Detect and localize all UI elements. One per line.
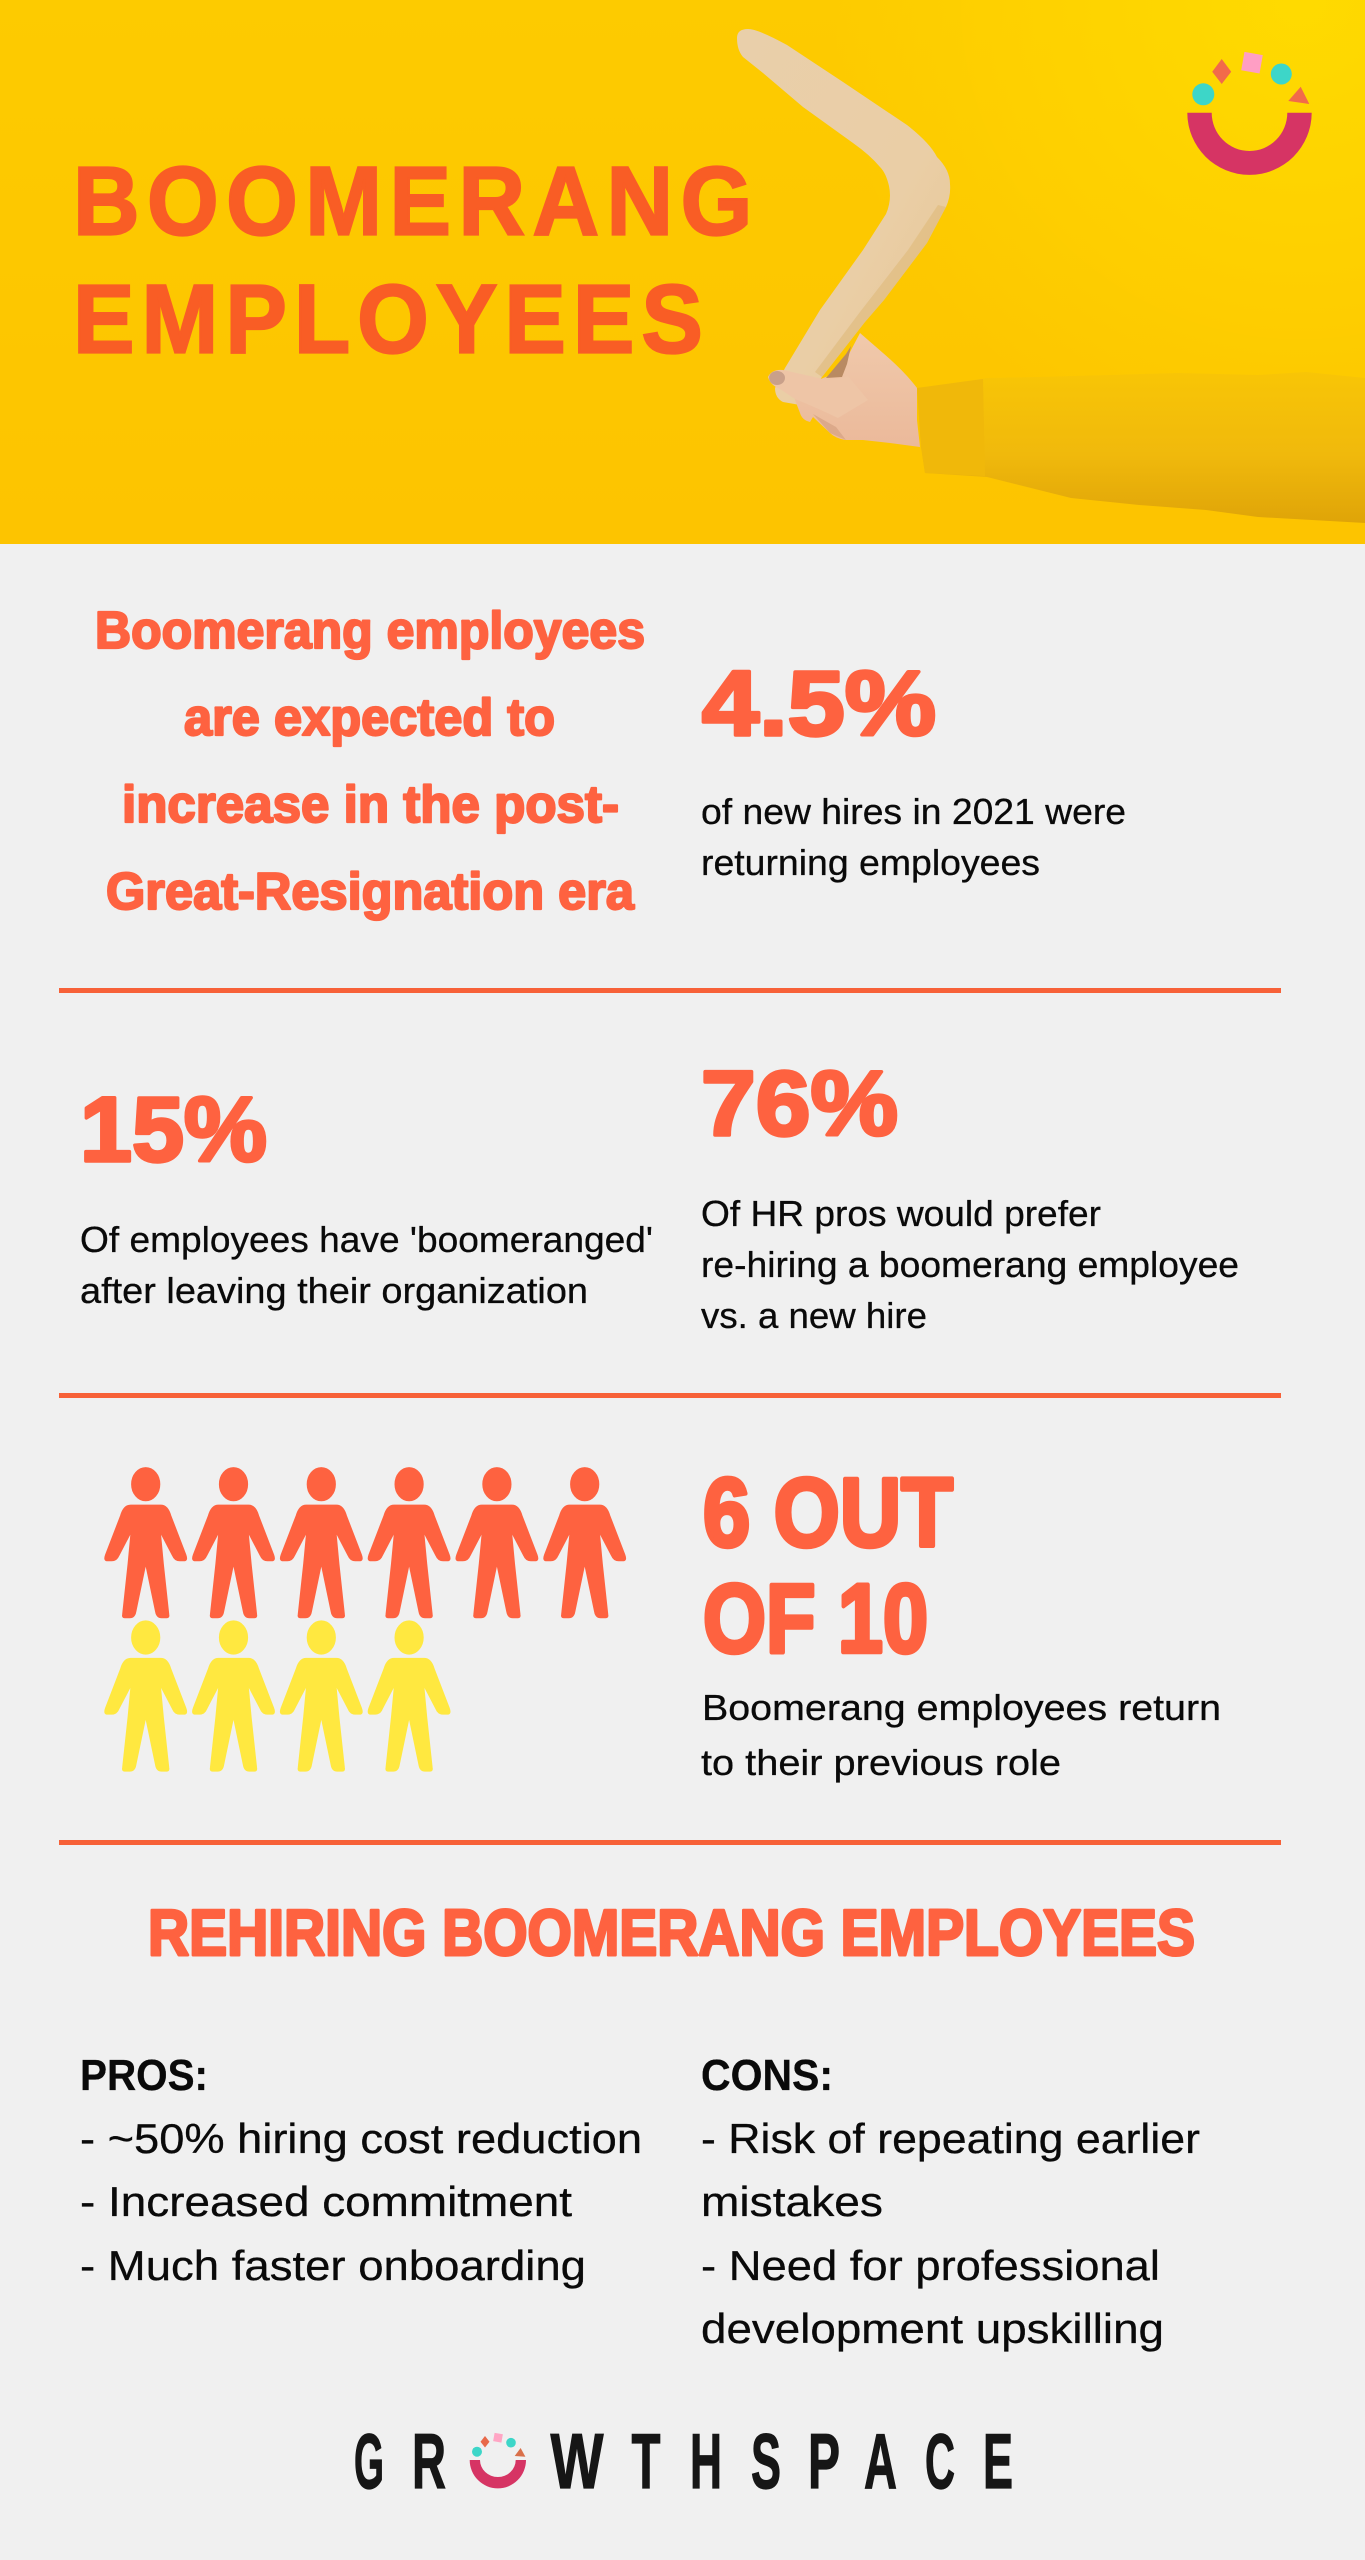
- stat text line 1: of new hires in 2021 were: [701, 791, 1126, 832]
- logo triangle: [1288, 87, 1309, 104]
- logo teal circle: [472, 2447, 482, 2457]
- stat text line 1: Of employees have 'boomeranged': [80, 1219, 653, 1260]
- letter S: S: [751, 2417, 781, 2505]
- stat text line 2: to their previous role: [701, 1742, 1061, 1783]
- footer: growthspace logo: G: [354, 2417, 384, 2505]
- logo diamond: [1212, 59, 1231, 84]
- header yellow background: [0, 0, 1365, 544]
- logo diamond: [480, 2436, 490, 2448]
- stat text line 1: Boomerang employees return: [702, 1687, 1221, 1728]
- stat: 15%: 15%: [80, 1079, 267, 1181]
- logo smile: [470, 2460, 526, 2488]
- stat text: new hires: [701, 791, 1126, 883]
- stat text line 2: returning employees: [701, 842, 1040, 883]
- con 2 line 1: - Need for professional: [701, 2242, 1160, 2289]
- heading: rehiring boomerang employees: REHIRING BOOMERANG EMPLOYEES: [148, 1896, 1195, 1969]
- photo: arm holding boomerang: [737, 29, 1365, 523]
- panel: 6 out of 10: [105, 1458, 1221, 1783]
- stat: 4.5%: 4.5%: [702, 653, 936, 755]
- divider 3: [59, 1840, 1281, 1845]
- stat text line 1: Of HR pros would prefer: [701, 1193, 1101, 1234]
- orange person 5: [456, 1468, 538, 1618]
- thumb: [768, 370, 868, 418]
- heading line 1: Boomerang employees: [95, 602, 645, 660]
- stat line 2: OF 10: [703, 1564, 928, 1673]
- heading: boomerang employees expected to increase: [95, 602, 645, 921]
- yellow person 4: [368, 1621, 450, 1771]
- logo triangle: [515, 2448, 525, 2457]
- yellow person 1: [105, 1621, 186, 1771]
- orange person 2: [193, 1468, 274, 1618]
- icon: growthspace logo: [1187, 52, 1312, 175]
- pro 1: - ~50% hiring cost reduction: [80, 2115, 642, 2162]
- con 2 line 2: development upskilling: [701, 2305, 1164, 2352]
- stat: 76%: 76%: [701, 1053, 898, 1155]
- title: [73, 147, 752, 374]
- panel: intro and 4.5%: [95, 602, 1126, 921]
- stat text: HR pros: [701, 1193, 1239, 1336]
- stat text line 2: after leaving their organization: [80, 1270, 588, 1311]
- letter H: H: [690, 2417, 722, 2505]
- logo teal circle: [1192, 83, 1214, 105]
- letter T: T: [632, 2417, 660, 2505]
- logo teal octagon: [1271, 64, 1292, 84]
- letter C: C: [925, 2417, 955, 2505]
- stat text line 3: vs. a new hire: [701, 1295, 927, 1336]
- title line 1: BOOMERANG: [73, 147, 752, 256]
- pro 2: - Increased commitment: [80, 2178, 572, 2225]
- logo pink square: [493, 2433, 503, 2443]
- palm of hand: [795, 333, 920, 447]
- cons heading: CONS:: [701, 2051, 833, 2100]
- thumbnail: [769, 371, 785, 385]
- orange person 4: [368, 1468, 450, 1618]
- boomerang shaded edge: [815, 205, 946, 377]
- title line 2: EMPLOYEES: [73, 265, 703, 374]
- stat text line 2: re-hiring a boomerang employee: [701, 1244, 1239, 1285]
- letter R: R: [412, 2417, 446, 2505]
- gap between boomerang and palm: [826, 346, 851, 378]
- letter A: A: [864, 2417, 897, 2505]
- letter W: W: [550, 2417, 604, 2505]
- yellow person 3: [280, 1621, 362, 1771]
- logo teal circle 2: [506, 2438, 516, 2448]
- yellow person 2: [193, 1621, 274, 1771]
- top right glow: [800, 0, 1365, 480]
- stat: 6 out of 10: [703, 1458, 953, 1673]
- finger line: [813, 414, 846, 440]
- sleeve cuff: [917, 379, 985, 476]
- logo smile: [1187, 113, 1312, 175]
- heading line 3: increase in the post-: [122, 776, 619, 834]
- sleeve: [917, 372, 1365, 523]
- list: cons: [701, 2051, 1200, 2352]
- logo mark in place of O: [470, 2433, 526, 2488]
- panel: 76% stat: [701, 1053, 1239, 1336]
- panel: rehiring pros and cons: [80, 1896, 1200, 2352]
- stat line 1: 6 OUT: [703, 1458, 953, 1567]
- heading line 2: are expected to: [184, 689, 555, 747]
- panel: header: [0, 0, 1365, 544]
- base yellow: [0, 0, 1365, 544]
- divider 2: [59, 1393, 1281, 1398]
- footer: growthspace logo: [354, 2417, 1013, 2505]
- heading line 4: Great-Resignation era: [106, 863, 635, 921]
- orange person 3: [280, 1468, 362, 1618]
- letter E: E: [983, 2417, 1013, 2505]
- letter P: P: [808, 2417, 840, 2505]
- pictogram: ten people: [105, 1468, 625, 1771]
- panel: 15% stat: [80, 1079, 653, 1311]
- con 1 line 2: mistakes: [701, 2178, 883, 2225]
- divider 1: [59, 988, 1281, 993]
- con 1 line 1: - Risk of repeating earlier: [701, 2115, 1200, 2162]
- list: pros: [80, 2051, 642, 2289]
- pros heading: PROS:: [80, 2051, 208, 2100]
- boomerang: [737, 29, 950, 405]
- stat text: boomeranged: [80, 1219, 653, 1311]
- orange person 6: [544, 1468, 626, 1618]
- stat text: previous role: [701, 1687, 1221, 1783]
- pro 3: - Much faster onboarding: [80, 2242, 586, 2289]
- orange person 1: [105, 1468, 186, 1618]
- logo pink square: [1241, 52, 1263, 73]
